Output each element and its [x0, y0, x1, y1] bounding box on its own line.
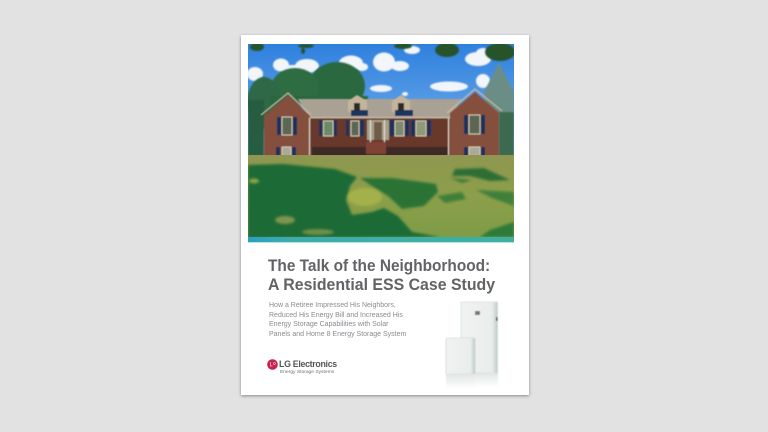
- title: A Residential ESS Case Study: [268, 275, 495, 294]
- logo wordmark: LG Electronics: [279, 359, 337, 369]
- tree shadows on lawn: [248, 164, 514, 238]
- foliage at top: [250, 43, 515, 61]
- subtitle text: How a Retiree Impressed His Neighbors,: [269, 302, 396, 309]
- icon: LG red circle: [267, 359, 278, 370]
- tall unit: [461, 302, 498, 373]
- title: The Talk of the Neighborhood:: [268, 256, 490, 275]
- subtitle text: Panels and Home 8 Energy Storage System: [269, 330, 406, 338]
- teal accent band: [248, 237, 514, 242]
- house: [261, 89, 502, 156]
- small unit: [446, 338, 475, 374]
- sunlit patch inside shadow: [249, 178, 382, 235]
- panel: report cover page: [241, 35, 529, 395]
- subtitle text: Reduced His Energy Bill and Increased His: [269, 312, 403, 318]
- logo: LG Electronics: [267, 359, 278, 370]
- floor reflection: [446, 374, 475, 389]
- cover photo: brick house and lawn: [248, 44, 514, 243]
- title: [268, 256, 495, 294]
- shutters and windows: [276, 115, 485, 156]
- logo tagline: Energy Storage Systems: [280, 370, 334, 375]
- subtitle text: Energy Storage Capabilities with Solar: [269, 321, 388, 328]
- sky: [248, 44, 514, 159]
- trees behind house: [247, 62, 514, 156]
- icon: energy storage battery units: [445, 301, 498, 385]
- dormers: [348, 95, 367, 112]
- subtitle text: [269, 302, 406, 338]
- clouds: [247, 46, 491, 96]
- porch and steps: [367, 120, 389, 140]
- lawn: [248, 155, 514, 237]
